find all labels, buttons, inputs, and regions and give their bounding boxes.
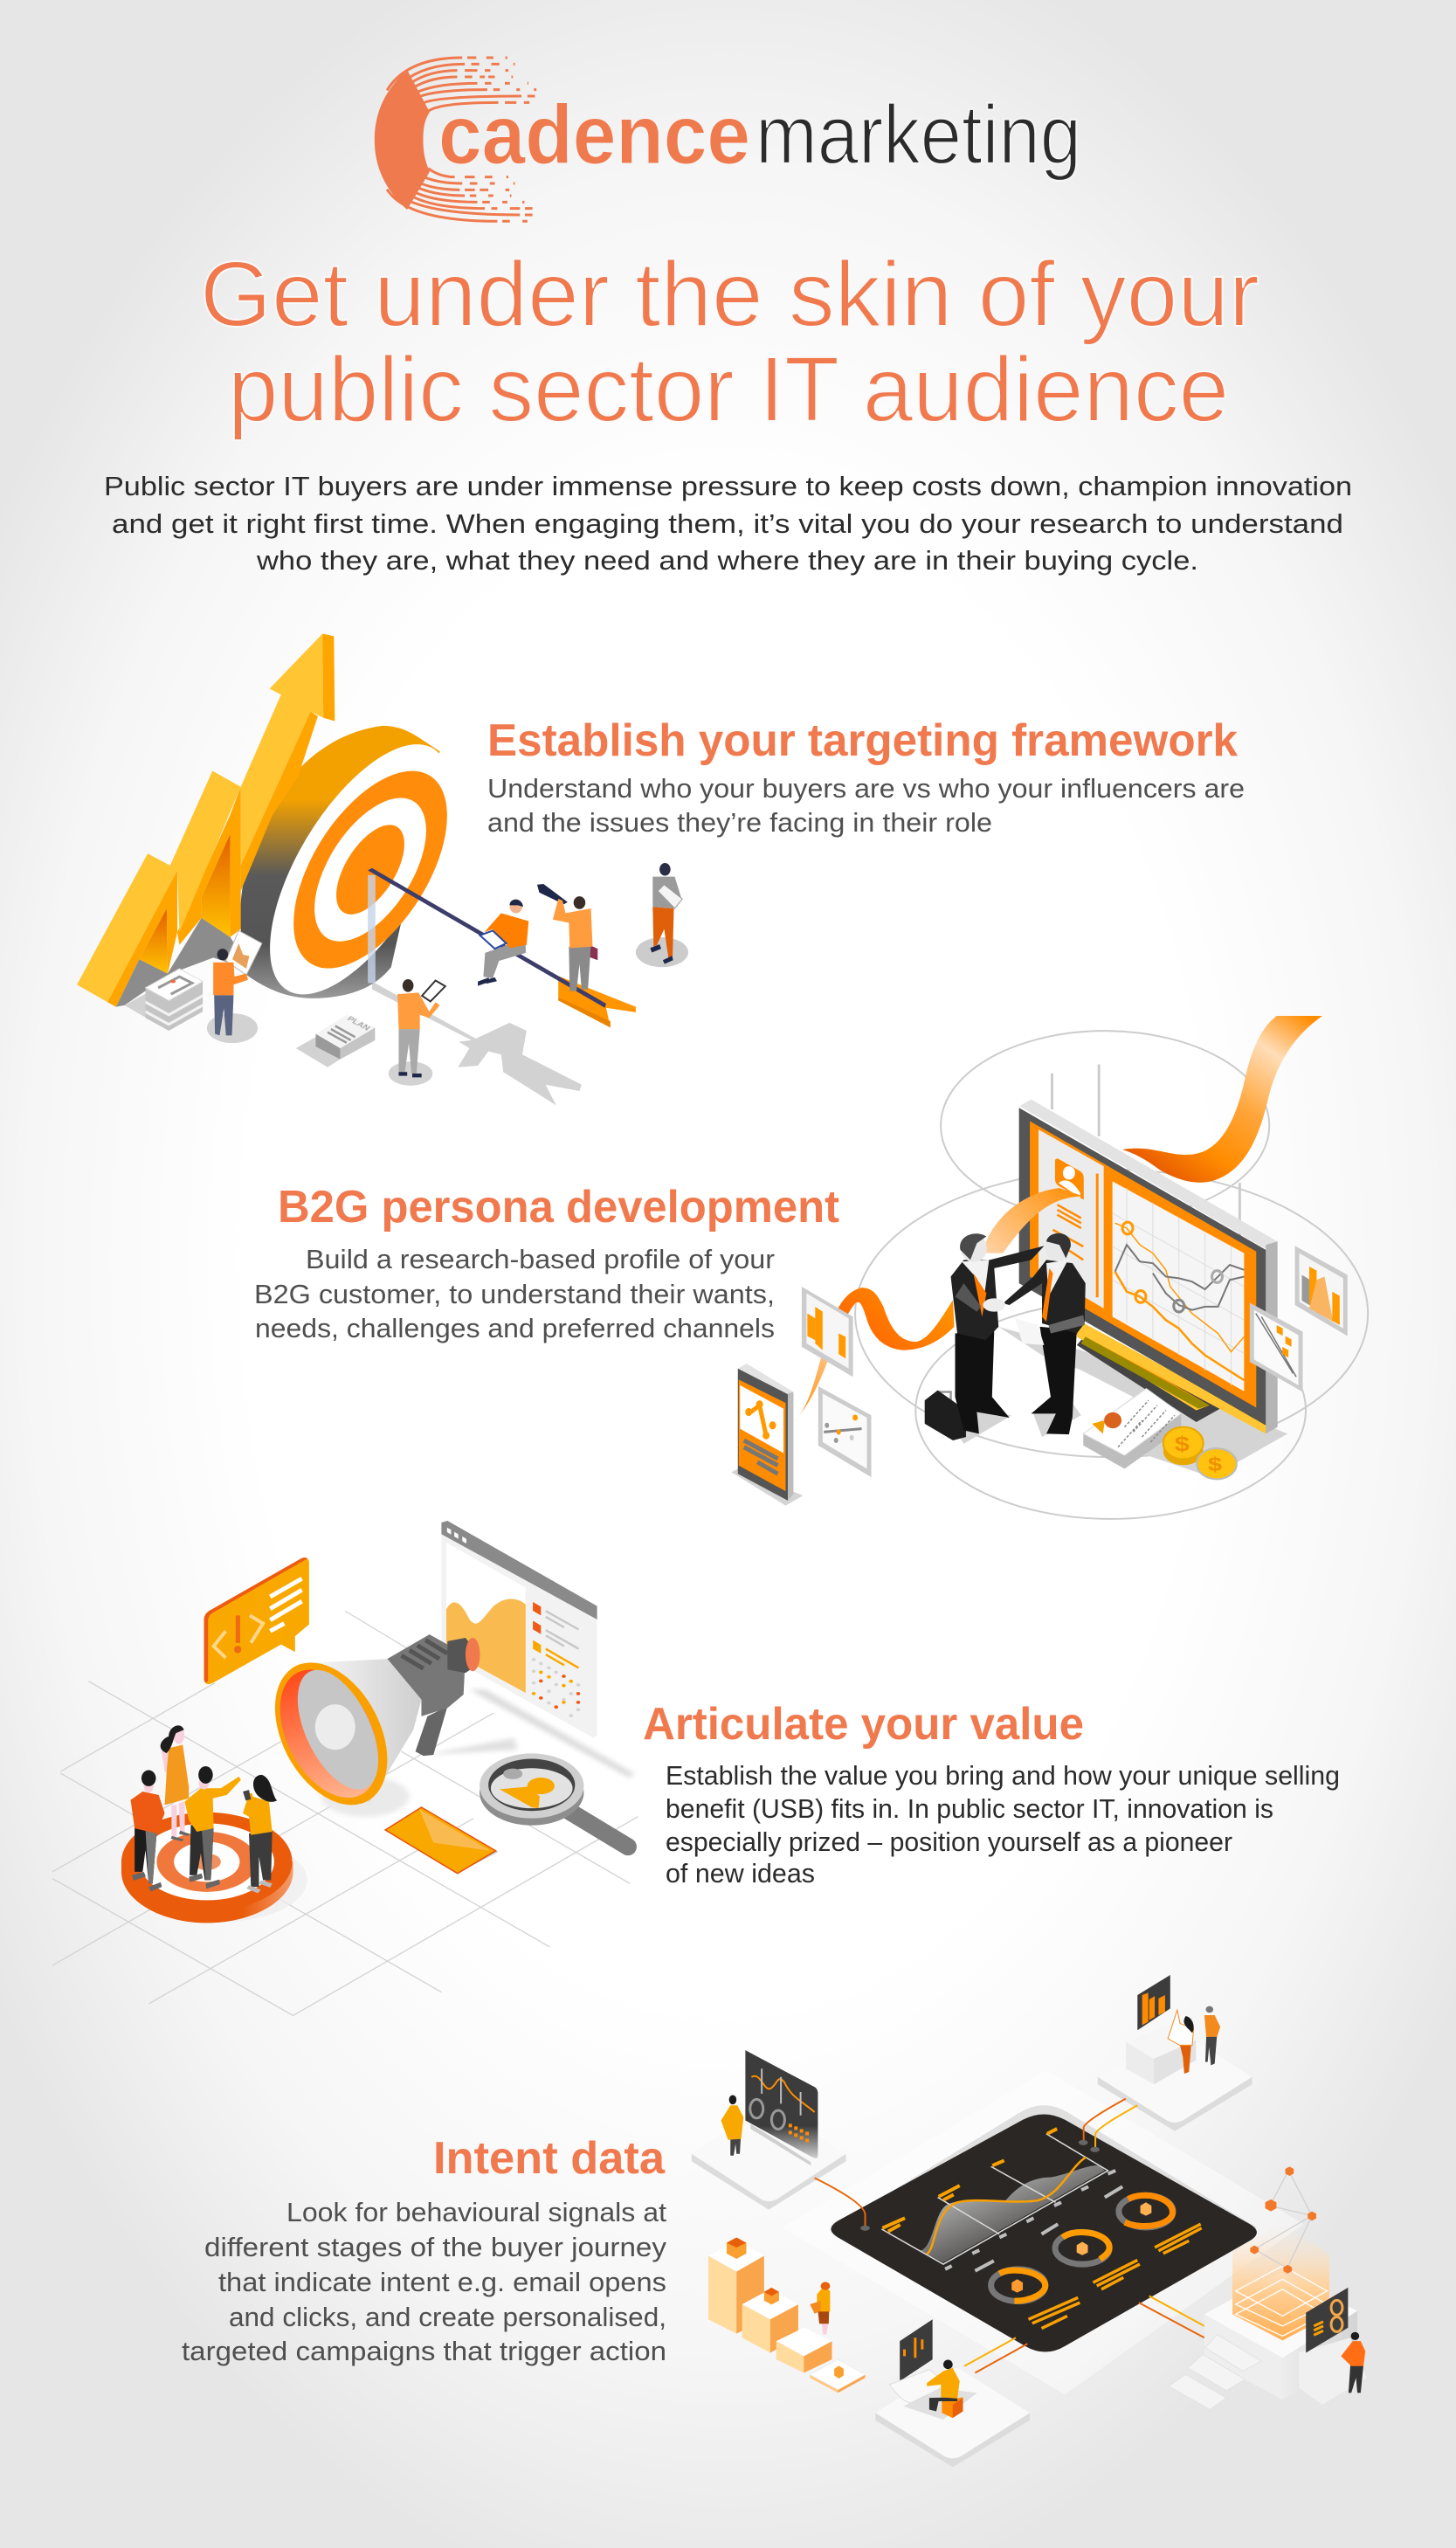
text: intent data body: targeted campaigns that trigger action [182, 2336, 666, 2366]
phone [731, 1364, 803, 1506]
text: establish body: and the issues they’re facing in their role [487, 807, 992, 838]
seated person on arrow [478, 899, 528, 986]
text: persona body: Build a research-based profile of your [306, 1244, 775, 1274]
list panel right [1250, 1302, 1303, 1391]
floor grid [52, 1611, 638, 2015]
scatter panel left [818, 1386, 872, 1477]
arrow shaft and fletching [368, 868, 636, 1027]
briefcase [925, 1391, 966, 1440]
person: man left [131, 1771, 165, 1891]
heading: articulate your value: Articulate your value [643, 1699, 1084, 1750]
text: intent data body [182, 2197, 667, 2366]
illustration: intent data platform [692, 1975, 1367, 2467]
text: articulate body: especially prized – position yourself as a pioneer [666, 1826, 1232, 1857]
text: articulate body [666, 1760, 1340, 1889]
person with chart [213, 930, 262, 1035]
illustration: persona development [731, 1016, 1368, 1519]
platform: upper right with team [1098, 1975, 1252, 2131]
title [200, 243, 1259, 441]
megaphone shadows [321, 1689, 634, 1817]
intro paragraph: who they are, what they need and where they are in their buying cycle. [256, 545, 1198, 576]
chart panel right [1295, 1246, 1348, 1336]
magnifying glass [480, 1753, 628, 1847]
megaphone [253, 1634, 480, 1818]
logo: cadence marketing [375, 58, 1081, 221]
intro paragraph [104, 471, 1352, 576]
platform: upper left with analyst [692, 2050, 846, 2210]
plan block: PLAN [346, 1014, 372, 1032]
heading: establish your targeting framework: Establish your targeting framework [487, 715, 1238, 766]
document stack [146, 969, 203, 1031]
target platform [121, 1813, 307, 1923]
intro paragraph: Public sector IT buyers are under immense pressure to keep costs down, champion innovation [104, 471, 1352, 501]
platform: tower with network [1169, 2166, 1367, 2410]
ribbon behind figures [985, 1188, 1083, 1253]
plan block [315, 1014, 375, 1060]
text: intent data body: Look for behavioural signals at [286, 2197, 666, 2227]
person: woman with phone [243, 1775, 277, 1893]
title: public sector IT audience [228, 338, 1229, 441]
dashboard area chart [881, 2129, 1122, 2271]
ribbon top right [1122, 1016, 1322, 1183]
platform: stepped blocks [708, 2237, 866, 2393]
intro paragraph: and get it right first time. When engaging them, it’s vital you do your research to understand [112, 508, 1343, 539]
text: persona body: needs, challenges and preferred channels [255, 1313, 775, 1343]
standing person with folder [650, 863, 682, 964]
dashboard orange bars [1028, 2224, 1202, 2329]
businessman right [983, 1233, 1086, 1434]
floor shadows [956, 1327, 1287, 1477]
text: establish body [487, 773, 1245, 838]
logo: cadence marketing: marketing [756, 88, 1081, 182]
orbit rings and poles [855, 1031, 1368, 1519]
dashboard ring gauges [991, 2195, 1173, 2302]
logo wordmark: cadence [438, 88, 750, 182]
illustration: target and arrow [77, 633, 688, 1105]
chart panel left [802, 1287, 853, 1377]
ground shadows [124, 937, 688, 1105]
illustration: megaphone [52, 1521, 638, 2015]
person: woman in dress [161, 1725, 190, 1841]
person with telescope [537, 884, 597, 991]
text: establish body: Understand who your buyers are vs who your influencers are [487, 773, 1245, 804]
text: articulate body: benefit (USB) fits in. In public sector IT, innovation is [666, 1793, 1273, 1824]
text: persona body [254, 1244, 775, 1343]
main dark dashboard [830, 2105, 1257, 2352]
gold coins: $ [1208, 1454, 1222, 1475]
gold coins: $ [1175, 1433, 1190, 1455]
heading: b2g persona development: B2G persona development [278, 1182, 839, 1233]
text: intent data body: and clicks, and create personalised, [229, 2302, 666, 2332]
gold coins [1163, 1427, 1237, 1479]
text: intent data body: that indicate intent e.g. email opens [218, 2267, 666, 2297]
document with seal [1083, 1389, 1181, 1469]
text: persona body: B2G customer, to understand their wants, [254, 1279, 775, 1309]
target cylinder side [240, 726, 440, 998]
code speech bubble [204, 1557, 309, 1684]
envelope [385, 1807, 499, 1874]
monitor [1019, 1100, 1278, 1433]
connector lines [815, 2099, 1204, 2372]
text: articulate body: Establish the value you bring and how your unique selling [666, 1760, 1340, 1791]
person: man pointing [185, 1766, 241, 1889]
line chart [1113, 1188, 1244, 1385]
text: articulate body: of new ideas [666, 1858, 815, 1889]
person with tablet [397, 979, 445, 1077]
text: intent data body: different stages of the buyer journey [204, 2232, 667, 2262]
businessman left [951, 1233, 1045, 1433]
heading: intent data: Intent data [433, 2133, 666, 2184]
white base diamond [782, 2070, 1303, 2394]
platform: bottom with seated person [875, 2319, 1030, 2467]
rising zigzag arrow [77, 633, 335, 1007]
ribbon left [793, 1288, 955, 1422]
logo mark: striped crescent [375, 58, 536, 221]
target rings [232, 728, 487, 1012]
persona card [1052, 1158, 1099, 1297]
title: Get under the skin of your [200, 243, 1259, 346]
browser window [441, 1521, 597, 1738]
